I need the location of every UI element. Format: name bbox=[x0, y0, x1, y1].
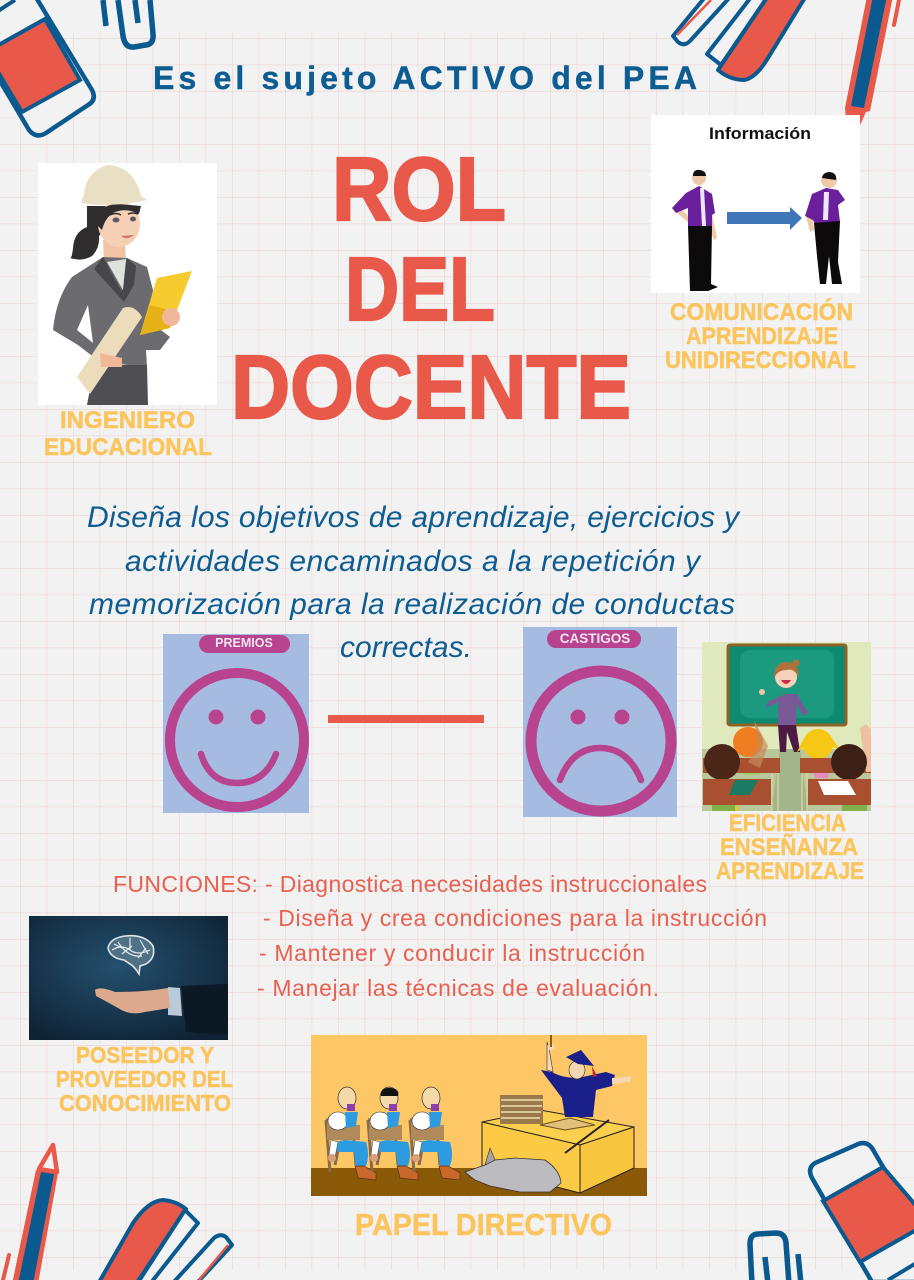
label: comunicacion aprendizaje unidireccional: UNIDIRECCIONAL bbox=[665, 347, 856, 374]
image: directive role cartoon bbox=[311, 1035, 647, 1196]
list: funciones: FUNCIONES: - Diagnostica necesidades instruccionales bbox=[113, 871, 707, 897]
title bbox=[231, 140, 631, 438]
subtitle: Es el sujeto ACTIVO del PEA bbox=[153, 60, 697, 96]
title: DEL bbox=[345, 240, 495, 340]
connector line bbox=[328, 715, 484, 723]
panel: premios smiley: PREMIOS bbox=[215, 636, 273, 650]
decoration: stapler bottom left bbox=[98, 1200, 232, 1280]
label: poseedor y proveedor: PROVEEDOR DEL bbox=[56, 1066, 233, 1092]
image: brain over hand bbox=[29, 916, 228, 1040]
list: funciones: - Diseña y crea condiciones para la instrucción bbox=[263, 905, 767, 931]
jacket with arms bbox=[53, 257, 170, 367]
paragraph: description: correctas. bbox=[340, 631, 472, 664]
decoration: paper clip top bbox=[103, 0, 153, 47]
paragraph: description bbox=[87, 501, 741, 664]
list: funciones: - Mantener y conducir la instrucción bbox=[259, 940, 645, 966]
label: ingeniero educacional: INGENIERO bbox=[60, 407, 195, 434]
decoration: eraser top left bbox=[0, 0, 94, 135]
image: information diagram bbox=[651, 115, 860, 293]
panel: castigos sad face bbox=[523, 627, 677, 817]
list: funciones bbox=[113, 871, 767, 1001]
label: poseedor y proveedor bbox=[56, 1042, 233, 1116]
label: poseedor y proveedor: POSEEDOR Y bbox=[76, 1042, 214, 1068]
decoration: pencil bottom left bbox=[3, 1145, 58, 1280]
image: engineer woman bbox=[38, 163, 217, 405]
panel: premios smiley bbox=[163, 634, 309, 813]
image: information diagram: Información bbox=[709, 124, 811, 143]
label: comunicacion aprendizaje unidireccional: APRENDIZAJE bbox=[686, 323, 838, 350]
label: comunicacion aprendizaje unidireccional bbox=[665, 298, 856, 374]
left man bbox=[707, 213, 717, 240]
paragraph: description: Diseña los objetivos de aprendizaje, ejercicios y bbox=[87, 501, 741, 534]
paragraph: description: actividades encaminados a la repetición y bbox=[125, 545, 702, 578]
label: poseedor y proveedor: CONOCIMIENTO bbox=[59, 1090, 231, 1116]
title: DOCENTE bbox=[231, 338, 631, 438]
label: eficiencia ensenanza aprendizaje: ENSEÑANZA bbox=[720, 833, 858, 861]
label: eficiencia ensenanza aprendizaje bbox=[716, 810, 864, 885]
label: eficiencia ensenanza aprendizaje: APRENDIZAJE bbox=[716, 858, 864, 885]
image: classroom bbox=[702, 642, 871, 811]
decoration: paper clip bottom right bbox=[750, 1233, 801, 1280]
decoration: eraser bottom right bbox=[810, 1143, 914, 1280]
title: ROL bbox=[332, 140, 506, 240]
label: eficiencia ensenanza aprendizaje: EFICIENCIA bbox=[729, 810, 846, 837]
label: ingeniero educacional bbox=[44, 407, 212, 461]
label: papel directivo: PAPEL DIRECTIVO bbox=[355, 1207, 612, 1242]
right man bbox=[806, 214, 814, 232]
paragraph: description: memorización para la realización de conductas bbox=[89, 588, 735, 621]
decoration: stapler top right bbox=[673, 0, 806, 80]
list: funciones: - Manejar las técnicas de evaluación. bbox=[257, 975, 659, 1001]
decoration: pen top right bbox=[845, 0, 899, 125]
label: ingeniero educacional: EDUCACIONAL bbox=[44, 434, 212, 461]
label: comunicacion aprendizaje unidireccional: COMUNICACIÓN bbox=[670, 298, 853, 326]
panel: castigos sad face: CASTIGOS bbox=[560, 631, 630, 646]
hair and ponytail bbox=[70, 206, 116, 260]
arrow bbox=[727, 207, 802, 230]
